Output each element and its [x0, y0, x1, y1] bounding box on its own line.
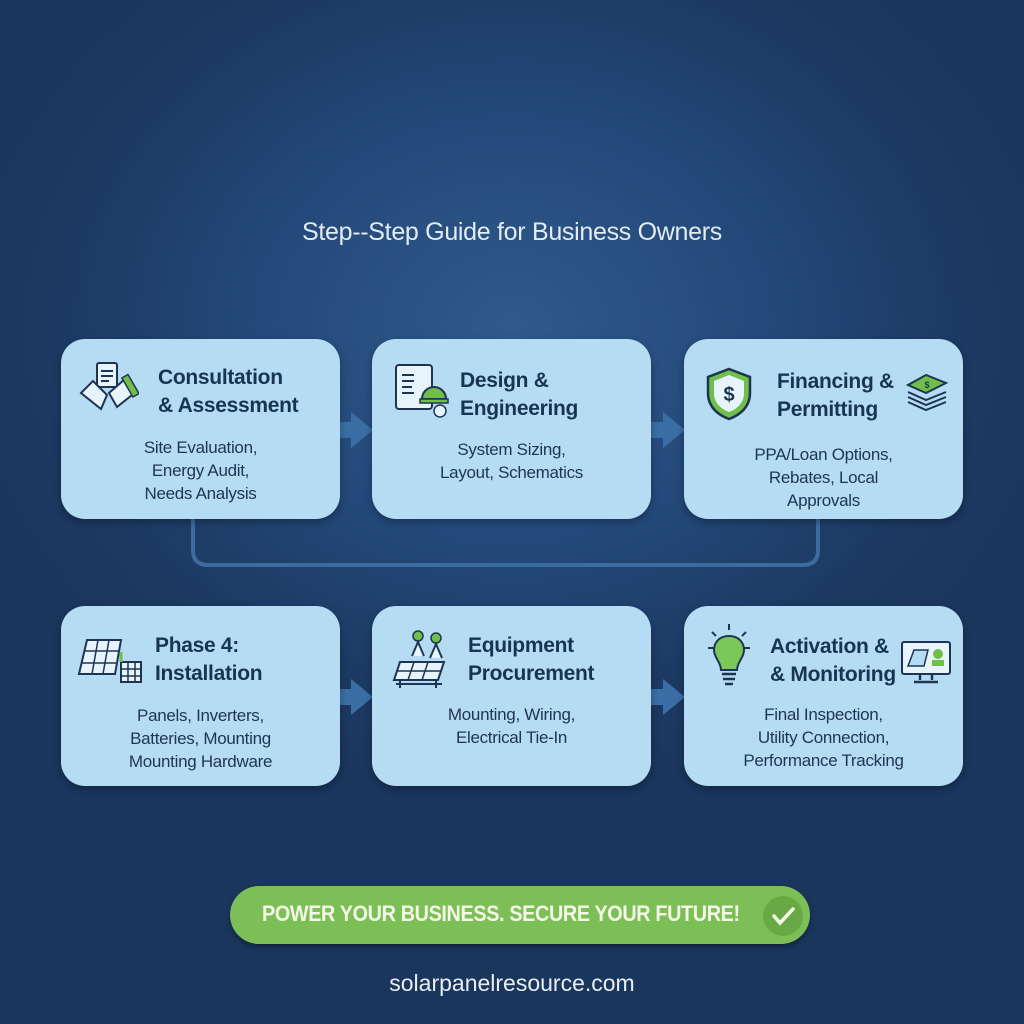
panel: equipment — [372, 606, 651, 786]
text: Mounting, Wiring, — [448, 705, 575, 724]
text: Final Inspection, — [764, 705, 883, 724]
banner: call to action — [230, 886, 810, 944]
text: Mounting Hardware — [129, 752, 272, 771]
panel: financing — [684, 339, 963, 519]
heading — [460, 369, 578, 420]
heading: Design & — [460, 369, 549, 392]
panel: activation — [684, 606, 963, 786]
icon: shield dollar — [706, 368, 752, 420]
heading — [158, 366, 298, 417]
text: Panels, Inverters, — [137, 706, 264, 725]
heading: Activation & — [770, 635, 889, 658]
text — [129, 706, 272, 771]
panel: consultation — [61, 339, 340, 519]
text — [743, 705, 904, 770]
text — [448, 705, 575, 747]
arrow: 2 to 3 — [651, 412, 684, 448]
banner text: POWER YOUR BUSINESS. SECURE YOUR FUTURE! — [262, 901, 740, 926]
heading: & Monitoring — [770, 663, 896, 686]
text: Electrical Tie-In — [456, 728, 567, 747]
icon: money stack — [906, 374, 948, 412]
text: Needs Analysis — [144, 484, 257, 503]
panel: design — [372, 339, 651, 519]
heading — [777, 370, 894, 421]
text: Batteries, Mounting — [130, 729, 271, 748]
title: Step--Step Guide for Business Owners — [302, 218, 722, 246]
heading: Permitting — [777, 398, 878, 421]
text: Layout, Schematics — [440, 463, 583, 482]
heading: Phase 4: — [155, 634, 239, 657]
heading: & Assessment — [158, 394, 298, 417]
icon: shield dollar: $ — [723, 384, 735, 406]
footer url: solarpanelresource.com — [389, 970, 635, 996]
arrow: 1 to 2 — [340, 412, 372, 448]
icon: handshake — [80, 362, 139, 411]
text: PPA/Loan Options, — [754, 445, 893, 464]
heading: Consultation — [158, 366, 283, 389]
heading: Procurement — [468, 662, 594, 685]
text: Approvals — [787, 491, 860, 510]
heading — [155, 634, 262, 685]
heading: Financing & — [777, 370, 894, 393]
icon: workers on panels — [392, 630, 446, 688]
arrow: 4 to 5 — [340, 679, 372, 715]
text: Energy Audit, — [152, 461, 249, 480]
icon: light bulb — [708, 624, 750, 686]
text: System Sizing, — [457, 440, 566, 459]
heading — [468, 634, 594, 685]
panel: installation — [61, 606, 340, 786]
text — [754, 445, 893, 510]
arrow: 5 to 6 — [651, 679, 684, 715]
text: Utility Connection, — [758, 728, 889, 747]
text — [440, 440, 583, 482]
icon: check — [763, 896, 803, 936]
text: Site Evaluation, — [144, 438, 257, 457]
icon: money stack: $ — [924, 380, 930, 390]
heading: Engineering — [460, 397, 578, 420]
heading — [770, 635, 896, 686]
text — [144, 438, 257, 503]
icon: monitor — [901, 641, 951, 684]
text: Performance Tracking — [743, 751, 904, 770]
icon: solar panel — [78, 639, 142, 683]
heading: Installation — [155, 662, 262, 685]
text: Rebates, Local — [769, 468, 878, 487]
icon: blueprint helmet — [395, 364, 449, 418]
heading: Equipment — [468, 634, 574, 657]
